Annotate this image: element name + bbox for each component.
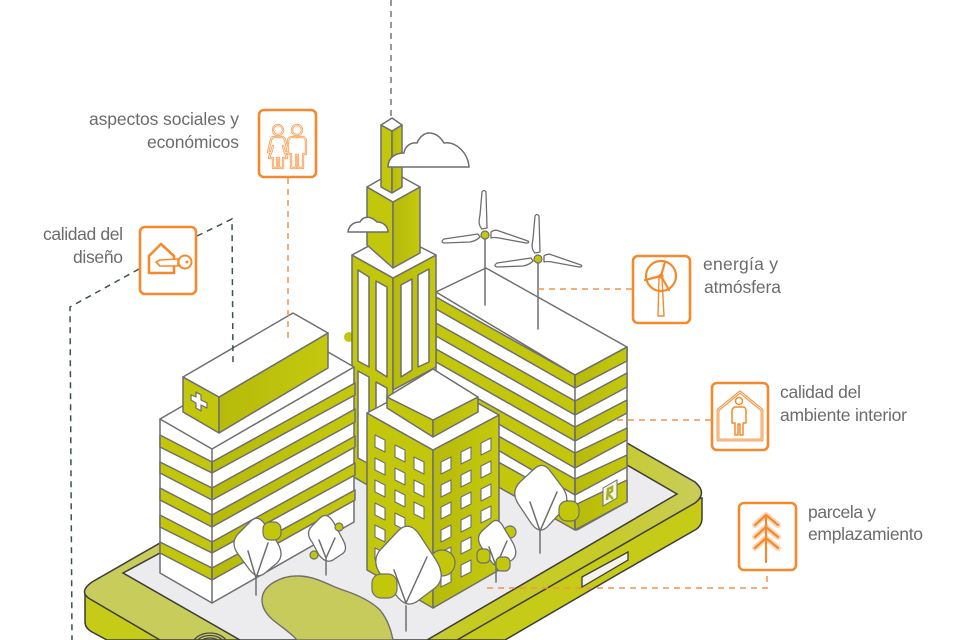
- label: aspectos sociales y economicos: aspectos sociales y: [89, 109, 239, 129]
- hospital cross: [191, 392, 207, 411]
- label: energia y atmosfera: energía y: [703, 254, 778, 274]
- hospital building: [160, 313, 355, 603]
- icon box: aspectos sociales: [259, 110, 316, 177]
- label: calidad del ambiente interior: [780, 382, 907, 425]
- dashed line: top: [390, 0, 392, 120]
- tower: [344, 118, 436, 500]
- label: calidad del diseno: diseño: [73, 247, 123, 267]
- dashed line: parcela: [487, 571, 767, 588]
- cloud small: [348, 217, 388, 232]
- icon: wind turbine: [645, 261, 676, 316]
- front building: [367, 369, 499, 608]
- icon box: energia y atmosfera: [633, 256, 690, 323]
- label: energia y atmosfera: atmósfera: [704, 277, 781, 297]
- icon: house and key: [149, 244, 192, 273]
- phone speaker slot: [582, 552, 628, 587]
- icon box: parcela y emplazamiento: [739, 503, 796, 570]
- dashed line: calidad del diseno: [70, 219, 233, 640]
- front building rooftop block: [387, 397, 433, 437]
- icon: woman and man: [268, 125, 306, 168]
- phone base: [84, 320, 702, 640]
- tree C: [372, 526, 455, 631]
- tree E: [515, 465, 579, 553]
- right building: [436, 268, 627, 530]
- hospital rooftop block: [183, 377, 219, 433]
- phone screen: [123, 335, 677, 640]
- dashed line: energia: [538, 288, 633, 290]
- dashed line: aspectos sociales: [287, 178, 289, 338]
- label: calidad del ambiente interior: ambiente interior: [780, 405, 907, 425]
- wind turbines and right building: [436, 190, 627, 530]
- icon box: calidad del diseno: [140, 227, 196, 294]
- dashed line: ambiente interior: [617, 419, 711, 421]
- turbine 2: [495, 214, 582, 329]
- label: calidad del diseno: [43, 224, 123, 267]
- tree pair left: [234, 515, 346, 595]
- cloud large: [388, 133, 469, 167]
- label: energia y atmosfera: [703, 254, 781, 297]
- label: calidad del ambiente interior: calidad del: [780, 382, 861, 402]
- turbine 1: [442, 190, 529, 305]
- front building windows: [375, 435, 491, 587]
- tower upper section: [367, 187, 393, 268]
- door: [603, 480, 617, 506]
- tree A: [234, 518, 281, 595]
- icon: person in house: [718, 392, 762, 440]
- label: aspectos sociales y economicos: económicos: [147, 132, 239, 152]
- label: aspectos sociales y economicos: [89, 109, 239, 152]
- icon: pine tree: [755, 515, 778, 562]
- label: parcela y emplazamiento: parcela y: [808, 502, 876, 522]
- lake: [262, 576, 393, 640]
- label: parcela y emplazamiento: [808, 502, 923, 544]
- tree B: [308, 515, 346, 575]
- tree group front: [372, 465, 579, 631]
- tree D: [477, 520, 516, 582]
- chimney: [381, 125, 392, 193]
- label: parcela y emplazamiento: emplazamiento: [808, 524, 923, 544]
- phone home button: [192, 633, 228, 640]
- icon box: calidad del ambiente interior: [712, 383, 768, 450]
- label: calidad del diseno: calidad del: [43, 224, 123, 244]
